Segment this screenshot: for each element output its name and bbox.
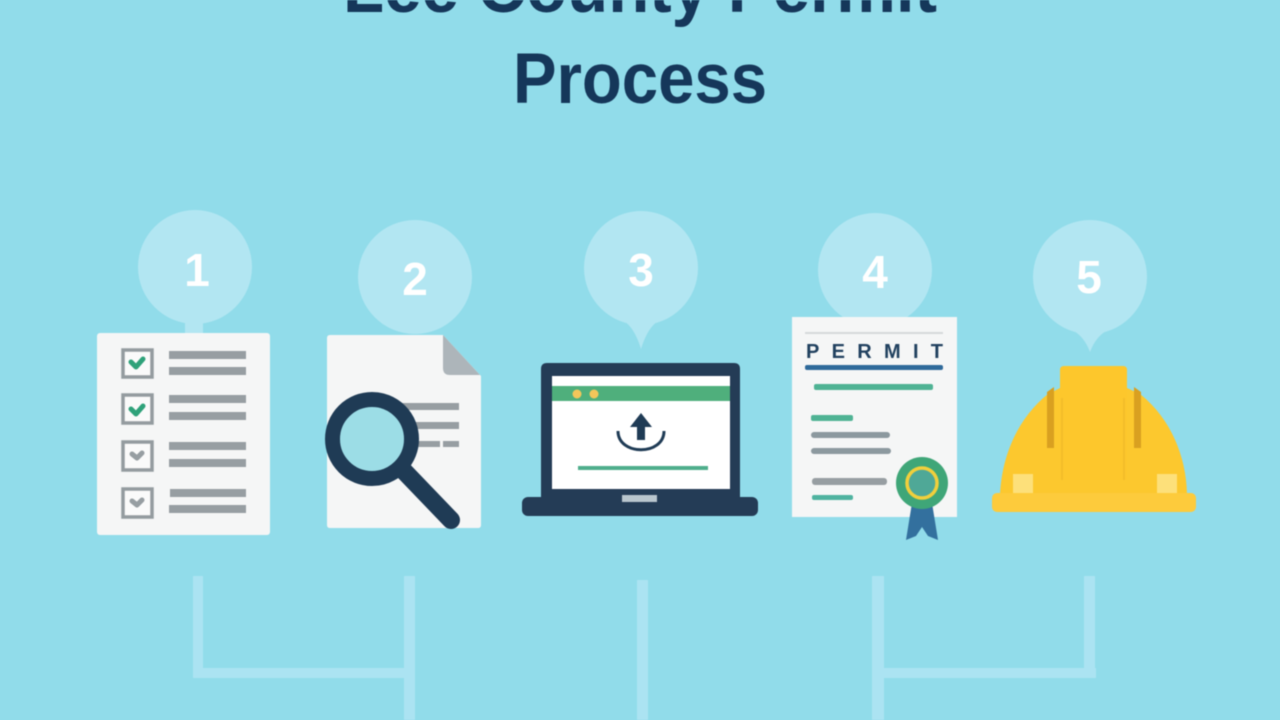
icon: award seal with ribbon (896, 457, 948, 540)
icon: yellow hard hat (992, 366, 1196, 512)
connector: step 3 (637, 580, 648, 720)
step 2: document review (327, 220, 481, 528)
icon: permit certificate (792, 317, 957, 540)
connector: steps 4 and 5 (872, 576, 1096, 720)
step 5: hard hat (992, 220, 1196, 512)
step 5 number bubble: 5 (1076, 251, 1102, 303)
connector: steps 1 and 2 (193, 576, 415, 720)
icon: laptop with upload (522, 363, 758, 516)
step 3: online upload (522, 211, 758, 516)
icon: document with magnifying glass (327, 335, 481, 528)
step 4 number bubble: 4 (862, 246, 888, 298)
title (343, 0, 937, 119)
step 4: permit issued (792, 213, 957, 540)
step 3 number bubble: 3 (628, 244, 654, 296)
step 2 number bubble (358, 220, 472, 334)
icon: permit certificate: PERMIT (806, 341, 943, 363)
step 1: checklist (97, 210, 270, 535)
icon: checklist document (97, 333, 270, 535)
step 1 number bubble: 1 (184, 244, 210, 296)
step 2 number bubble: 2 (402, 253, 428, 305)
step 3 number bubble (584, 211, 698, 349)
step 1 number bubble (138, 210, 252, 335)
step 5 number bubble (1033, 220, 1147, 352)
step 4 number bubble (818, 213, 932, 327)
title: Process (513, 40, 767, 119)
